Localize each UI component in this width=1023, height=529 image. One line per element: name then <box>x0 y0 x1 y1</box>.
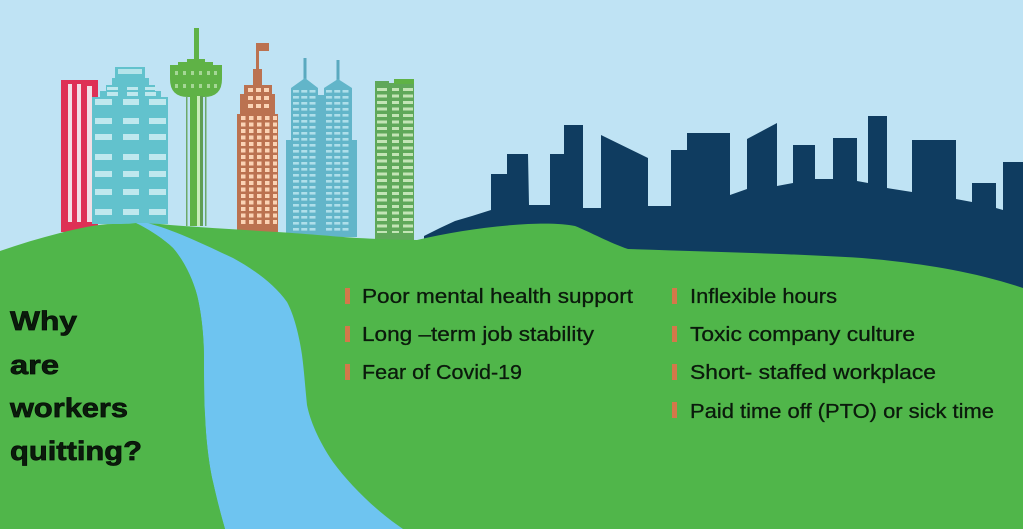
list: right column reasons: Paid time off (PTO) or sick time <box>690 401 994 423</box>
building: red tower <box>61 80 98 232</box>
heading: Why <box>10 306 77 336</box>
list: left column reasons <box>345 286 633 384</box>
building: teal stepped tower <box>92 67 168 224</box>
list: right column reasons: Inflexible hours <box>690 286 837 308</box>
heading: workers <box>9 393 128 423</box>
river <box>136 223 403 529</box>
list: right column reasons: Toxic company culture <box>690 324 915 346</box>
building: green observation tower <box>170 28 222 226</box>
green hill: front left <box>0 223 225 529</box>
building: orange flag tower <box>237 43 278 232</box>
heading: quitting? <box>10 436 142 466</box>
heading <box>9 306 142 466</box>
list: right column reasons <box>672 286 994 423</box>
green hill: back <box>120 224 1023 529</box>
list: left column reasons: Fear of Covid-19 <box>362 362 522 384</box>
list: left column reasons: Poor mental health support <box>362 286 633 308</box>
heading: are <box>10 350 59 380</box>
list: left column reasons: Long –term job stability <box>362 324 594 346</box>
list: right column reasons: Short- staffed workplace <box>690 362 936 384</box>
building: green striped tower <box>375 79 414 240</box>
dark navy skyline silhouette <box>424 116 1023 300</box>
building: blue twin towers <box>286 58 357 237</box>
